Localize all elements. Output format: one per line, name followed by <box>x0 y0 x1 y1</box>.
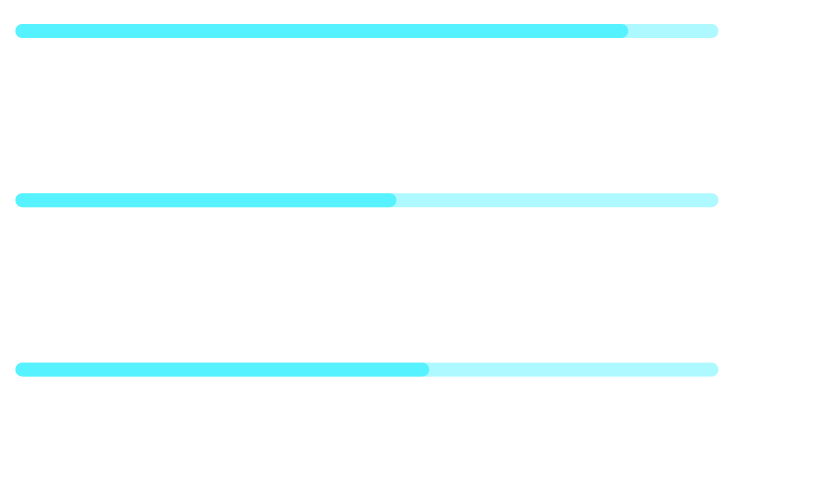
progress bar 2 <box>15 193 718 207</box>
progress bar 3 <box>15 363 718 377</box>
bar 2 fill <box>15 193 396 207</box>
bar 1 fill <box>15 24 628 38</box>
progress bar 1 <box>15 24 718 38</box>
bar 3 fill <box>15 363 429 377</box>
